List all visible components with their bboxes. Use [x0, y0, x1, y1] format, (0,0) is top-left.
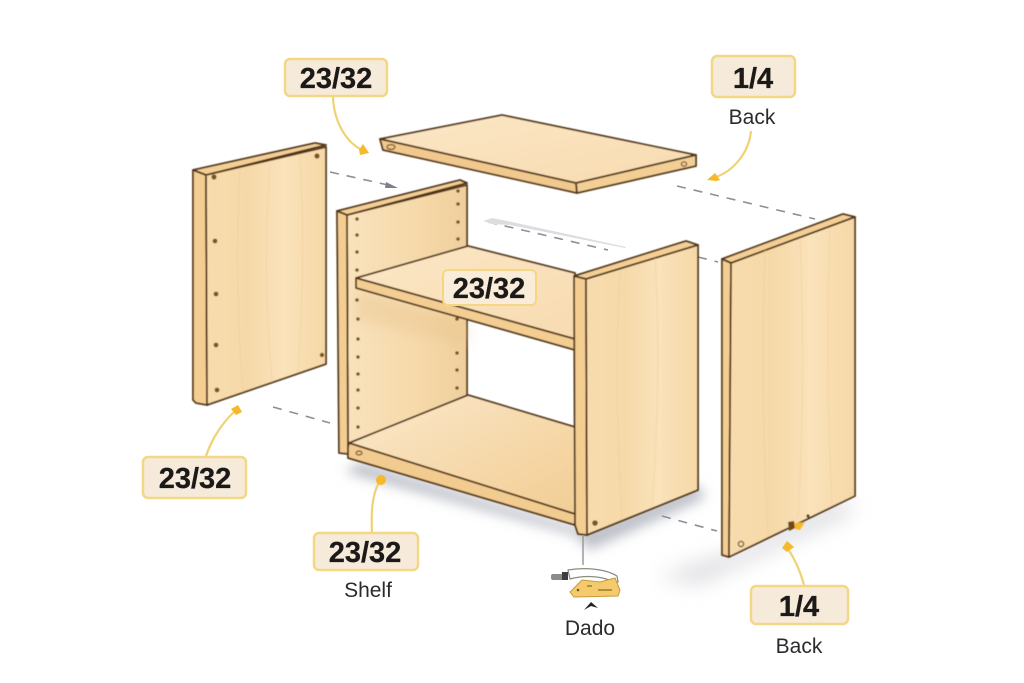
callout: bottom right 1/4 Back: 1/4 — [779, 591, 819, 623]
panel: cabinet left side front edge — [337, 211, 348, 454]
callout: top right 1/4 Back: Back — [729, 106, 776, 129]
assembly dashed lines — [273, 172, 815, 531]
callout: top left 23/32: 23/32 — [300, 63, 372, 95]
callout: left panel 23/32 — [143, 405, 246, 498]
shelf holes — [355, 189, 460, 429]
panel: top shelf — [380, 115, 696, 193]
callout: bottom shelf 23/32 Shelf: 23/32 — [329, 537, 401, 569]
panel: cabinet left side top edge — [337, 180, 467, 215]
panel: cabinet right side — [574, 241, 698, 535]
panel: left side panel — [193, 143, 326, 405]
callout: top right 1/4 Back — [707, 56, 795, 181]
callout: left panel 23/32: 23/32 — [159, 463, 231, 495]
panel: middle shelf — [356, 246, 575, 350]
callout: bottom right 1/4 Back — [751, 541, 848, 658]
callout: middle shelf 23/32: 23/32 — [453, 273, 525, 305]
ground shadows — [345, 462, 855, 582]
panel: cabinet carcass — [337, 180, 698, 535]
callout: top right 1/4 Back: 1/4 — [733, 63, 773, 95]
callout: bottom right 1/4 Back: Back — [776, 635, 823, 658]
label: Dado: Dado — [565, 617, 615, 640]
panel: bottom shelf — [348, 395, 575, 525]
icon: dado tool — [551, 535, 620, 610]
callout: top left 23/32 — [285, 59, 387, 155]
callout: bottom shelf 23/32 Shelf: Shelf — [344, 579, 392, 602]
panel: cabinet left side inner face — [347, 185, 467, 444]
panel: back panel — [722, 214, 855, 557]
callout: bottom shelf 23/32 Shelf — [314, 475, 418, 602]
